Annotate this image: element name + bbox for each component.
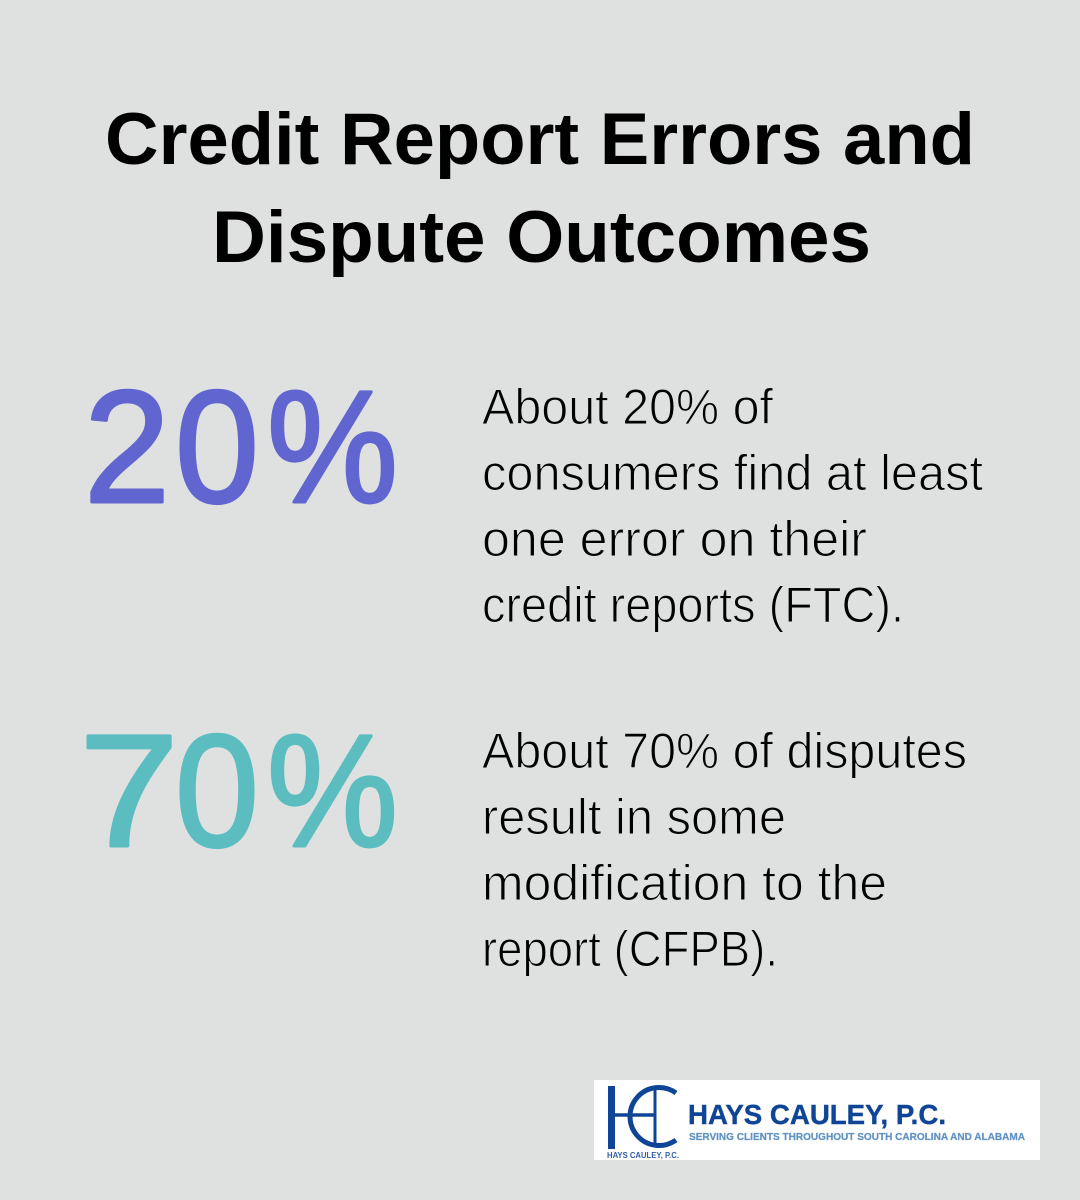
statistic: 70% — [79, 701, 398, 880]
text block: 20% description: About 20% of — [482, 379, 773, 435]
statistic: 20%: % — [267, 357, 398, 536]
text block: 20% description: one error on their — [482, 511, 867, 567]
text block: 20% description: consumers find at least — [482, 445, 983, 501]
title — [105, 99, 975, 278]
text block: 20% description: credit reports (FTC). — [482, 577, 904, 633]
company name: HAYS CAULEY, P.C. — [688, 1099, 946, 1130]
statistic: 20%: 0 — [175, 357, 259, 536]
text block: 70% description: result in some — [482, 789, 786, 845]
text block: 70% description — [482, 723, 967, 977]
logo: Hays Cauley, P.C. — [594, 1080, 1040, 1160]
text block: 20% description — [482, 379, 983, 633]
statistic: 70%: 0 — [175, 701, 259, 880]
statistic: 20%: 2 — [84, 357, 170, 536]
text block: 70% description: modification to the — [482, 855, 887, 911]
small logo caption: HAYS CAULEY, P.C. — [607, 1151, 679, 1160]
icon: HC monogram — [612, 1086, 676, 1149]
statistic: 70%: 7 — [79, 701, 179, 880]
statistic: 20% — [84, 357, 398, 536]
title: Credit Report Errors and — [105, 99, 975, 180]
statistic: 70%: % — [267, 701, 398, 880]
title: Dispute Outcomes — [212, 197, 871, 278]
text block: 70% description: report (CFPB). — [482, 921, 778, 977]
tagline: SERVING CLIENTS THROUGHOUT SOUTH CAROLINA AND ALABAMA — [689, 1131, 1025, 1143]
text block: 70% description: About 70% of disputes — [482, 723, 967, 779]
